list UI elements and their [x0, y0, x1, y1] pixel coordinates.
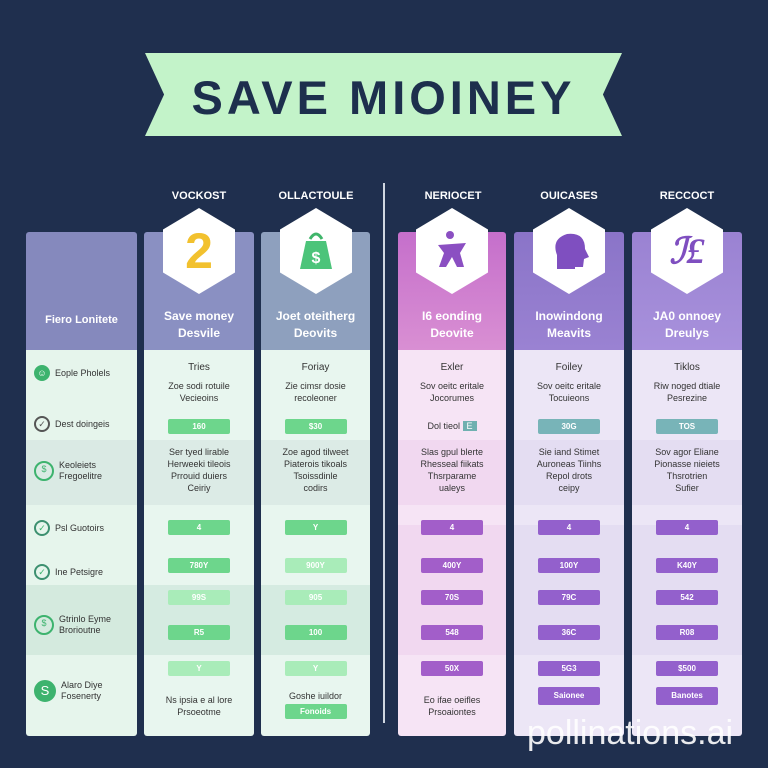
panel: column 4: Sov oeitc eritale	[537, 381, 601, 391]
panel: column 2: Goshe iuildor	[289, 691, 342, 701]
panel: column 3: Exler	[441, 362, 463, 373]
panel: column 2: Zie cimsr dosie	[285, 381, 346, 391]
panel: column 1: Herweeki tileois	[167, 459, 231, 469]
panel: column 1: Ns ipsia e al lore	[166, 695, 232, 705]
icon: currency	[651, 208, 723, 294]
panel: column 1: 4	[197, 523, 201, 532]
title text: SAVE MIOINEY	[191, 71, 576, 124]
icon: figure	[416, 208, 488, 294]
panel: row labels: Eople Pholels	[55, 368, 110, 378]
column labels: OLLACTOULE	[279, 190, 353, 202]
panel: column 4: 5G3	[561, 664, 577, 673]
panel: row labels: Keoleiets	[59, 460, 96, 470]
panel: column 5: $500	[678, 664, 696, 673]
column labels	[172, 190, 714, 202]
panel: row labels: ✓	[38, 419, 46, 429]
panel: row labels: $	[41, 464, 46, 474]
panel: column 1	[144, 232, 254, 736]
panel: column 5: Dreulys	[665, 326, 709, 340]
panel: column 4: 100Y	[560, 561, 578, 570]
panel: column 5: 542	[680, 593, 694, 602]
panel: column 1: Vecieoins	[180, 393, 218, 403]
panel: row labels: $	[41, 618, 46, 628]
icon: number 2	[163, 208, 235, 294]
panel: column 3	[398, 232, 506, 736]
panel: column 3: ualeys	[439, 483, 465, 493]
panel: row labels: ✓	[38, 567, 46, 577]
panel: column 2: Joet oteitherg	[276, 309, 355, 323]
panel: column 3: 548	[445, 628, 459, 637]
panel: column 4: Foiley	[556, 362, 582, 373]
panel: column 5: Pesrezine	[667, 393, 707, 403]
panel: column 1: 99S	[192, 593, 206, 602]
panel: column 5: Sufier	[675, 483, 699, 493]
panel: row labels	[26, 232, 137, 736]
panel: column 1: Desvile	[178, 326, 220, 340]
panel: column 4	[514, 232, 624, 736]
panel: column 4: ceipy	[558, 483, 580, 493]
panel: column 3: I6 eonding	[422, 309, 482, 323]
panel: column 4: 36C	[562, 628, 576, 637]
panel: row labels: Fiero Lonitete	[45, 314, 118, 326]
watermark: pollinations.ai	[527, 714, 733, 752]
panel: column 4: Auroneas Tiinhs	[537, 459, 601, 469]
panel: row labels: Psl Guotoirs	[55, 522, 104, 532]
panel: column 2: Foriay	[302, 362, 329, 373]
panel: row labels: S	[41, 683, 49, 698]
column labels: VOCKOST	[172, 190, 226, 202]
panel: column 2: recoleoner	[294, 393, 337, 403]
panel: row labels: Alaro Diye	[61, 680, 103, 690]
panel: column 2	[261, 232, 370, 736]
divider	[383, 183, 385, 723]
panel: column 2: Tsoissdinle	[293, 471, 338, 481]
panel: column 2: 900Y	[306, 561, 325, 570]
panel: column 5: Riw noged dtiale	[654, 381, 720, 391]
panel: column 4: Repol drots	[546, 471, 592, 481]
panel: row labels: Ine Petsigre	[55, 566, 103, 576]
panel: column 2: codirs	[303, 483, 328, 493]
panel: column 3: Dol tieol E	[427, 421, 473, 431]
panel: column 5: Banotes	[671, 691, 703, 700]
title banner	[145, 53, 622, 136]
panel: column 5: 4	[685, 523, 689, 532]
panel: column 1: Ceiriy	[187, 483, 210, 493]
panel: column 1: Ser tyed lirable	[169, 447, 229, 457]
column labels: RECCOCT	[660, 190, 714, 202]
panel: column 4: Inowindong	[535, 309, 603, 323]
icon: money bag: $	[312, 250, 321, 267]
panel: column 1: R5	[194, 628, 204, 637]
panel: row labels: Gtrinlo Eyme	[59, 614, 111, 624]
panel: column 5: K40Y	[677, 561, 697, 570]
panel: column 3: Sov oeitc eritale	[420, 381, 484, 391]
panel: column 2: 905	[309, 593, 322, 602]
panel: row labels: Brorioutne	[59, 625, 101, 635]
panel: column 3: Deovite	[430, 326, 474, 340]
panel: column 5: Thsrotrien	[667, 471, 707, 481]
panel: column 4: Meavits	[547, 326, 591, 340]
panel: row labels: Fosenerty	[61, 691, 101, 701]
icon: currency: ℐ£	[670, 231, 704, 271]
panel: column 2: Fonoids	[300, 707, 331, 716]
panel: row labels: Dest doingeis	[55, 418, 110, 428]
panel: column 1: 780Y	[190, 561, 208, 570]
panel: column 2: Zoe agod tilweet	[282, 447, 349, 457]
panel: column 5: TOS	[679, 422, 695, 431]
panel: column 3: Prsoaiontes	[428, 707, 476, 717]
panel: column 1: Zoe sodi rotuile	[168, 381, 230, 391]
panel: column 1: Prrouid duiers	[171, 471, 227, 481]
panel: column 5: JA0 onnoey	[653, 309, 721, 323]
panel: column 5: Sov agor Eliane	[655, 447, 719, 457]
panel: column 1: Prsoeotme	[177, 707, 221, 717]
panel: column 1: 160	[192, 422, 206, 431]
panel: column 2: $30	[309, 422, 322, 431]
panel: column 2: 100	[309, 628, 322, 637]
panel: column 3: 70S	[445, 593, 459, 602]
panel: column 2: Piaterois tikoals	[284, 459, 347, 469]
panel: column 4: 79C	[562, 593, 576, 602]
panel: column 3: Jocorumes	[430, 393, 474, 403]
panel: column 5: Tiklos	[674, 362, 700, 373]
panel: column 4: Tocuieons	[549, 393, 589, 403]
panel: column 4: Saionee	[554, 691, 584, 700]
panel: column 3: 4	[450, 523, 454, 532]
panel: column 4: 4	[567, 523, 571, 532]
column labels: OUICASES	[540, 190, 598, 202]
panel: column 2: Deovits	[294, 326, 337, 340]
panel: column 5: Pionasse nieiets	[654, 459, 720, 469]
panel: column 1: Save money	[164, 309, 234, 323]
panel: column 3: Thsrparame	[428, 471, 476, 481]
icon: head	[533, 208, 605, 294]
panel: column 3: Eo ifae oeifles	[424, 695, 480, 705]
panel: column 2: Y	[313, 523, 318, 532]
panel: column 2: Y	[313, 664, 318, 673]
panel: row labels: ☺	[37, 368, 47, 378]
panel: column 3: 400Y	[443, 561, 461, 570]
panel: column 4: Sie iand Stimet	[539, 447, 599, 457]
panel: row labels: Fregoelitre	[59, 471, 102, 481]
panel: column 5: R08	[680, 628, 694, 637]
icon: money bag	[280, 208, 352, 294]
column labels: NERIOCET	[425, 190, 481, 202]
icon: number 2: 2	[185, 223, 213, 279]
panel: column 1: Y	[196, 664, 202, 673]
panel: column 3: 50X	[445, 664, 459, 673]
panel: row labels: ✓	[38, 523, 46, 533]
panel: column 3: Rhesseal fiikats	[420, 459, 484, 469]
panel: column 1: Tries	[188, 362, 210, 373]
panel: column 3: Slas gpul blerte	[421, 447, 483, 457]
panel: column 4: 30G	[561, 422, 577, 431]
panel: column 5	[632, 232, 742, 736]
